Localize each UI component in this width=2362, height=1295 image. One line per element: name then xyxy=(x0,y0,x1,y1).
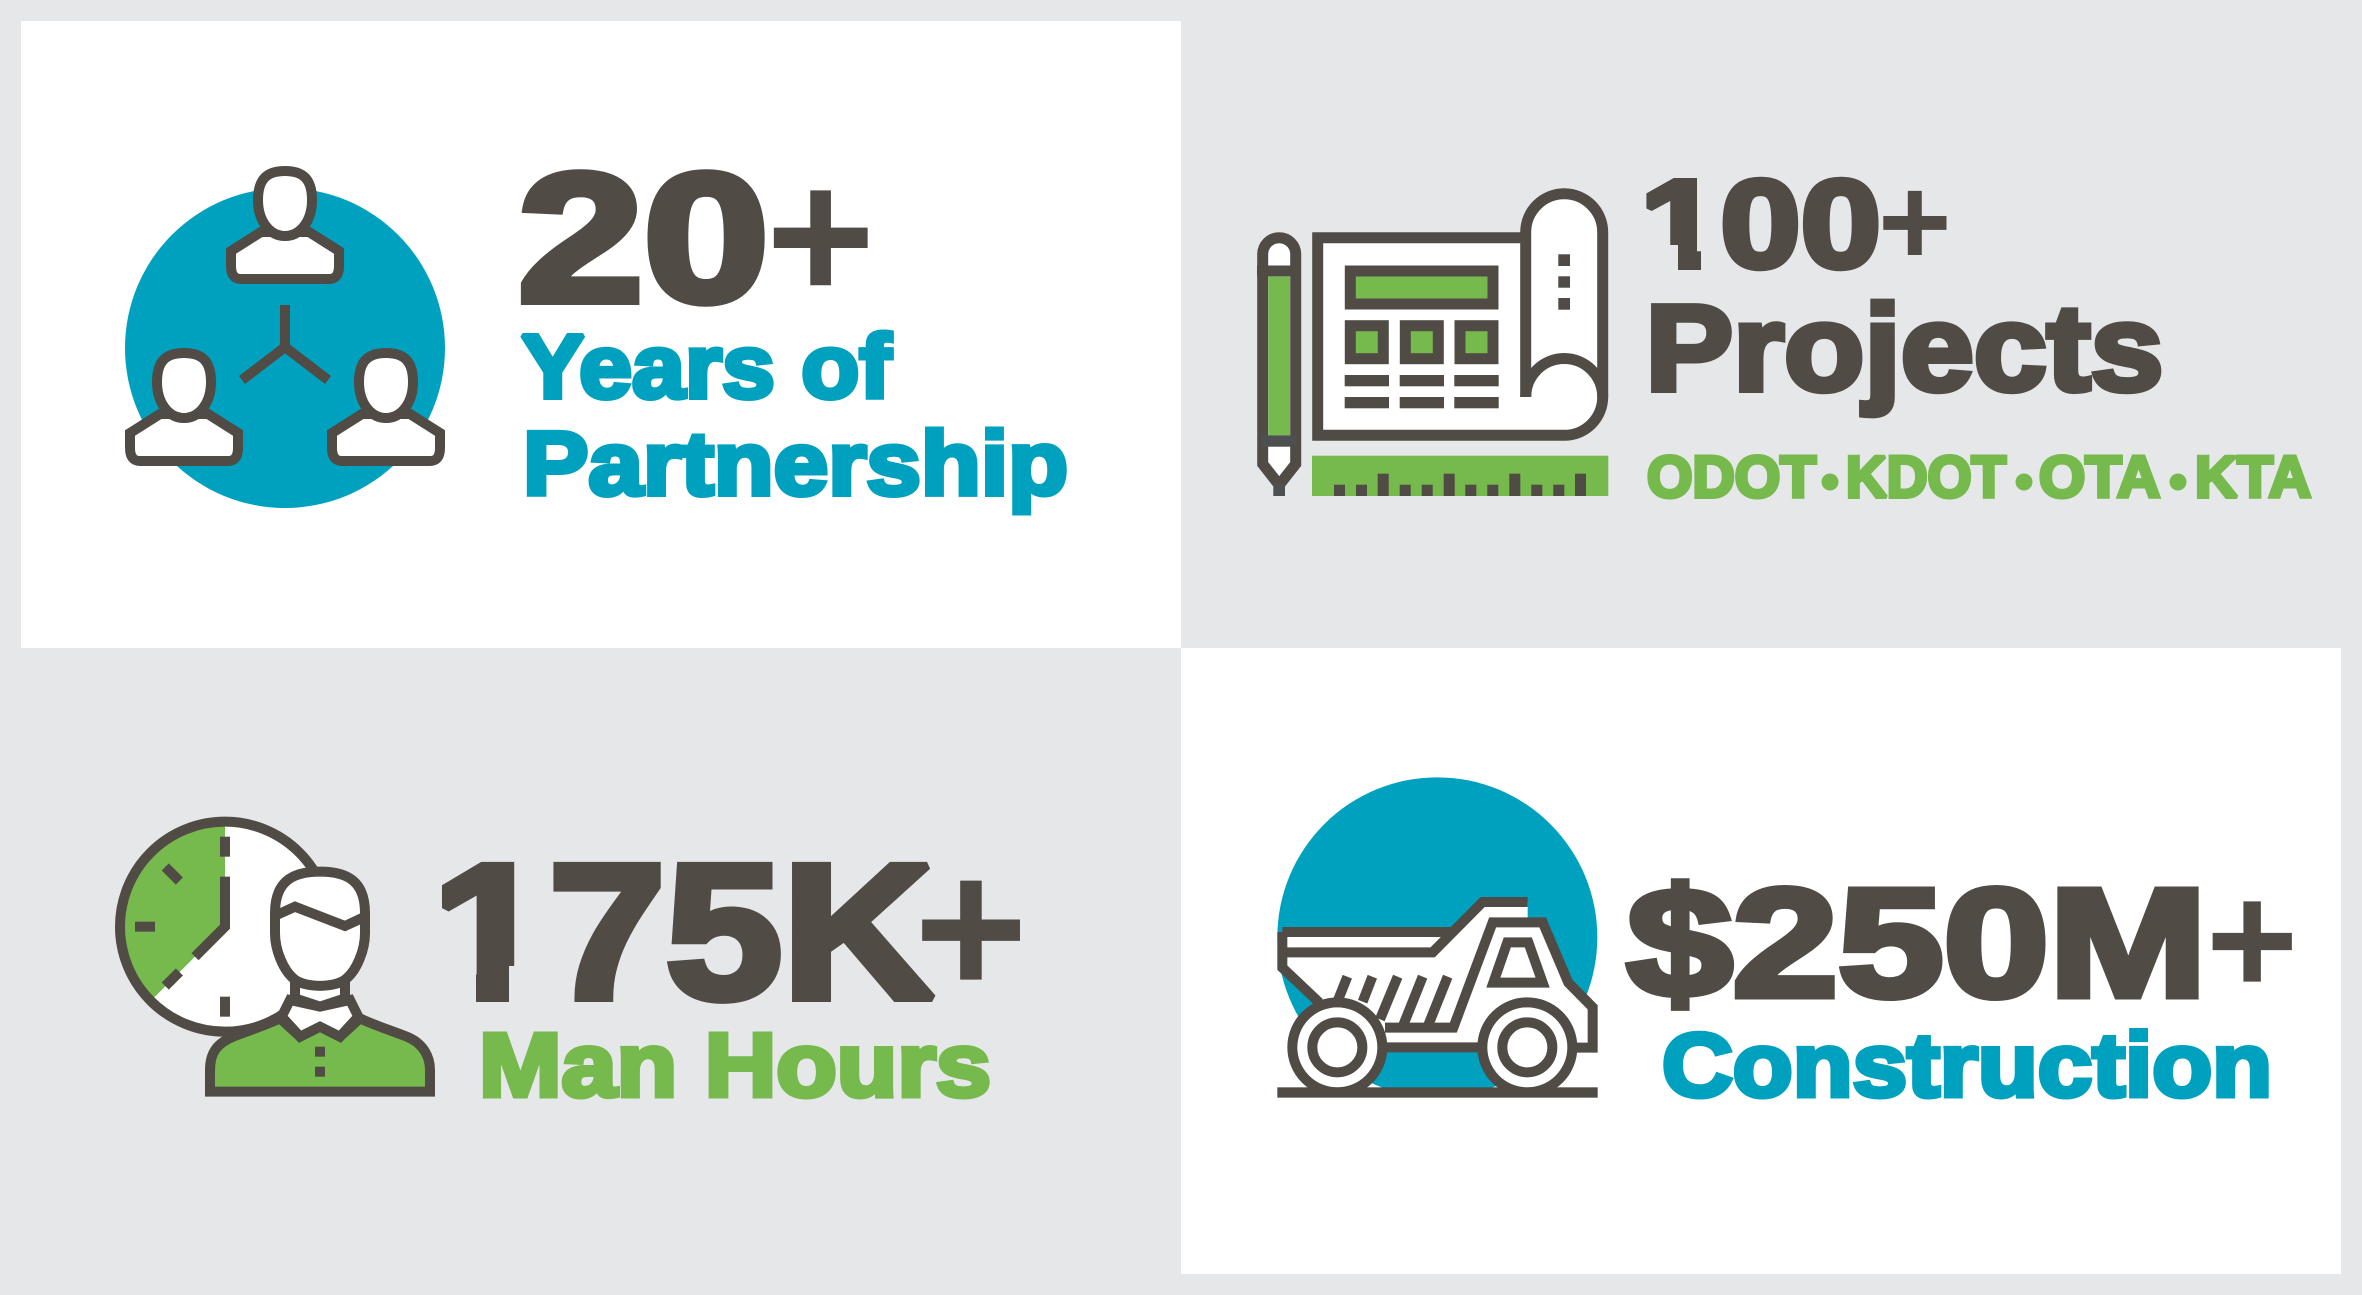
stat: 100+: 100 xyxy=(1640,155,1881,294)
stat: 175K+ xyxy=(442,862,1020,1004)
label: ODOT KDOT OTA KTA: ODOT xyxy=(1647,445,1816,510)
icon: dump truck xyxy=(1277,777,1598,1098)
stat: 20+: 20 xyxy=(518,135,769,340)
icon: top person xyxy=(231,171,339,279)
stat: 175K+: 175K xyxy=(432,824,934,1039)
label: ODOT KDOT OTA KTA: KTA xyxy=(2195,445,2311,510)
icon: ruler xyxy=(1312,456,1608,496)
icon: bottom-left person xyxy=(130,353,238,461)
icon: clock xyxy=(120,822,330,1032)
icon: clock and worker xyxy=(120,822,430,1092)
panel: construction xyxy=(1181,648,2341,1274)
stat: 175K+: + xyxy=(914,819,1028,1037)
icon: pencil xyxy=(1257,238,1301,496)
stat: $250M+: $250M xyxy=(1627,857,2207,1029)
panel: projects xyxy=(1257,151,2311,510)
stat: $250M+: + xyxy=(2206,852,2298,1028)
label: ODOT KDOT OTA KTA xyxy=(1647,445,2311,510)
icon: worker xyxy=(210,872,430,1092)
panel: man hours xyxy=(120,819,1028,1116)
label: ODOT KDOT OTA KTA: KDOT xyxy=(1846,445,2006,510)
label: Man Hours: Man Hours xyxy=(479,1016,991,1116)
label: Years of Partnership xyxy=(521,318,1068,514)
icon: truck body xyxy=(1282,902,1593,1048)
label: Years of Partnership: Years of xyxy=(521,318,892,418)
icon: rear wheel xyxy=(1292,1002,1382,1092)
stat: $250M+ xyxy=(1627,852,2298,1029)
stat: 100+: + xyxy=(1878,151,1952,292)
label: Years of Partnership: Partnership xyxy=(523,414,1068,514)
panel: years of partnership xyxy=(21,21,1181,648)
icon: front wheel xyxy=(1482,1002,1572,1092)
label: Projects: Projects xyxy=(1646,280,2164,416)
stat: 20+: + xyxy=(766,131,875,340)
label: Construction: Construction xyxy=(1662,1016,2272,1116)
icon: three connected people xyxy=(125,171,445,508)
stat: 20+ xyxy=(518,131,875,340)
icon: bottom-right person xyxy=(332,353,440,461)
stat: 100+ xyxy=(1646,176,1946,272)
icon: connector xyxy=(242,305,328,380)
icon: blueprint xyxy=(1318,194,1603,435)
label: ODOT KDOT OTA KTA: OTA xyxy=(2039,445,2160,510)
